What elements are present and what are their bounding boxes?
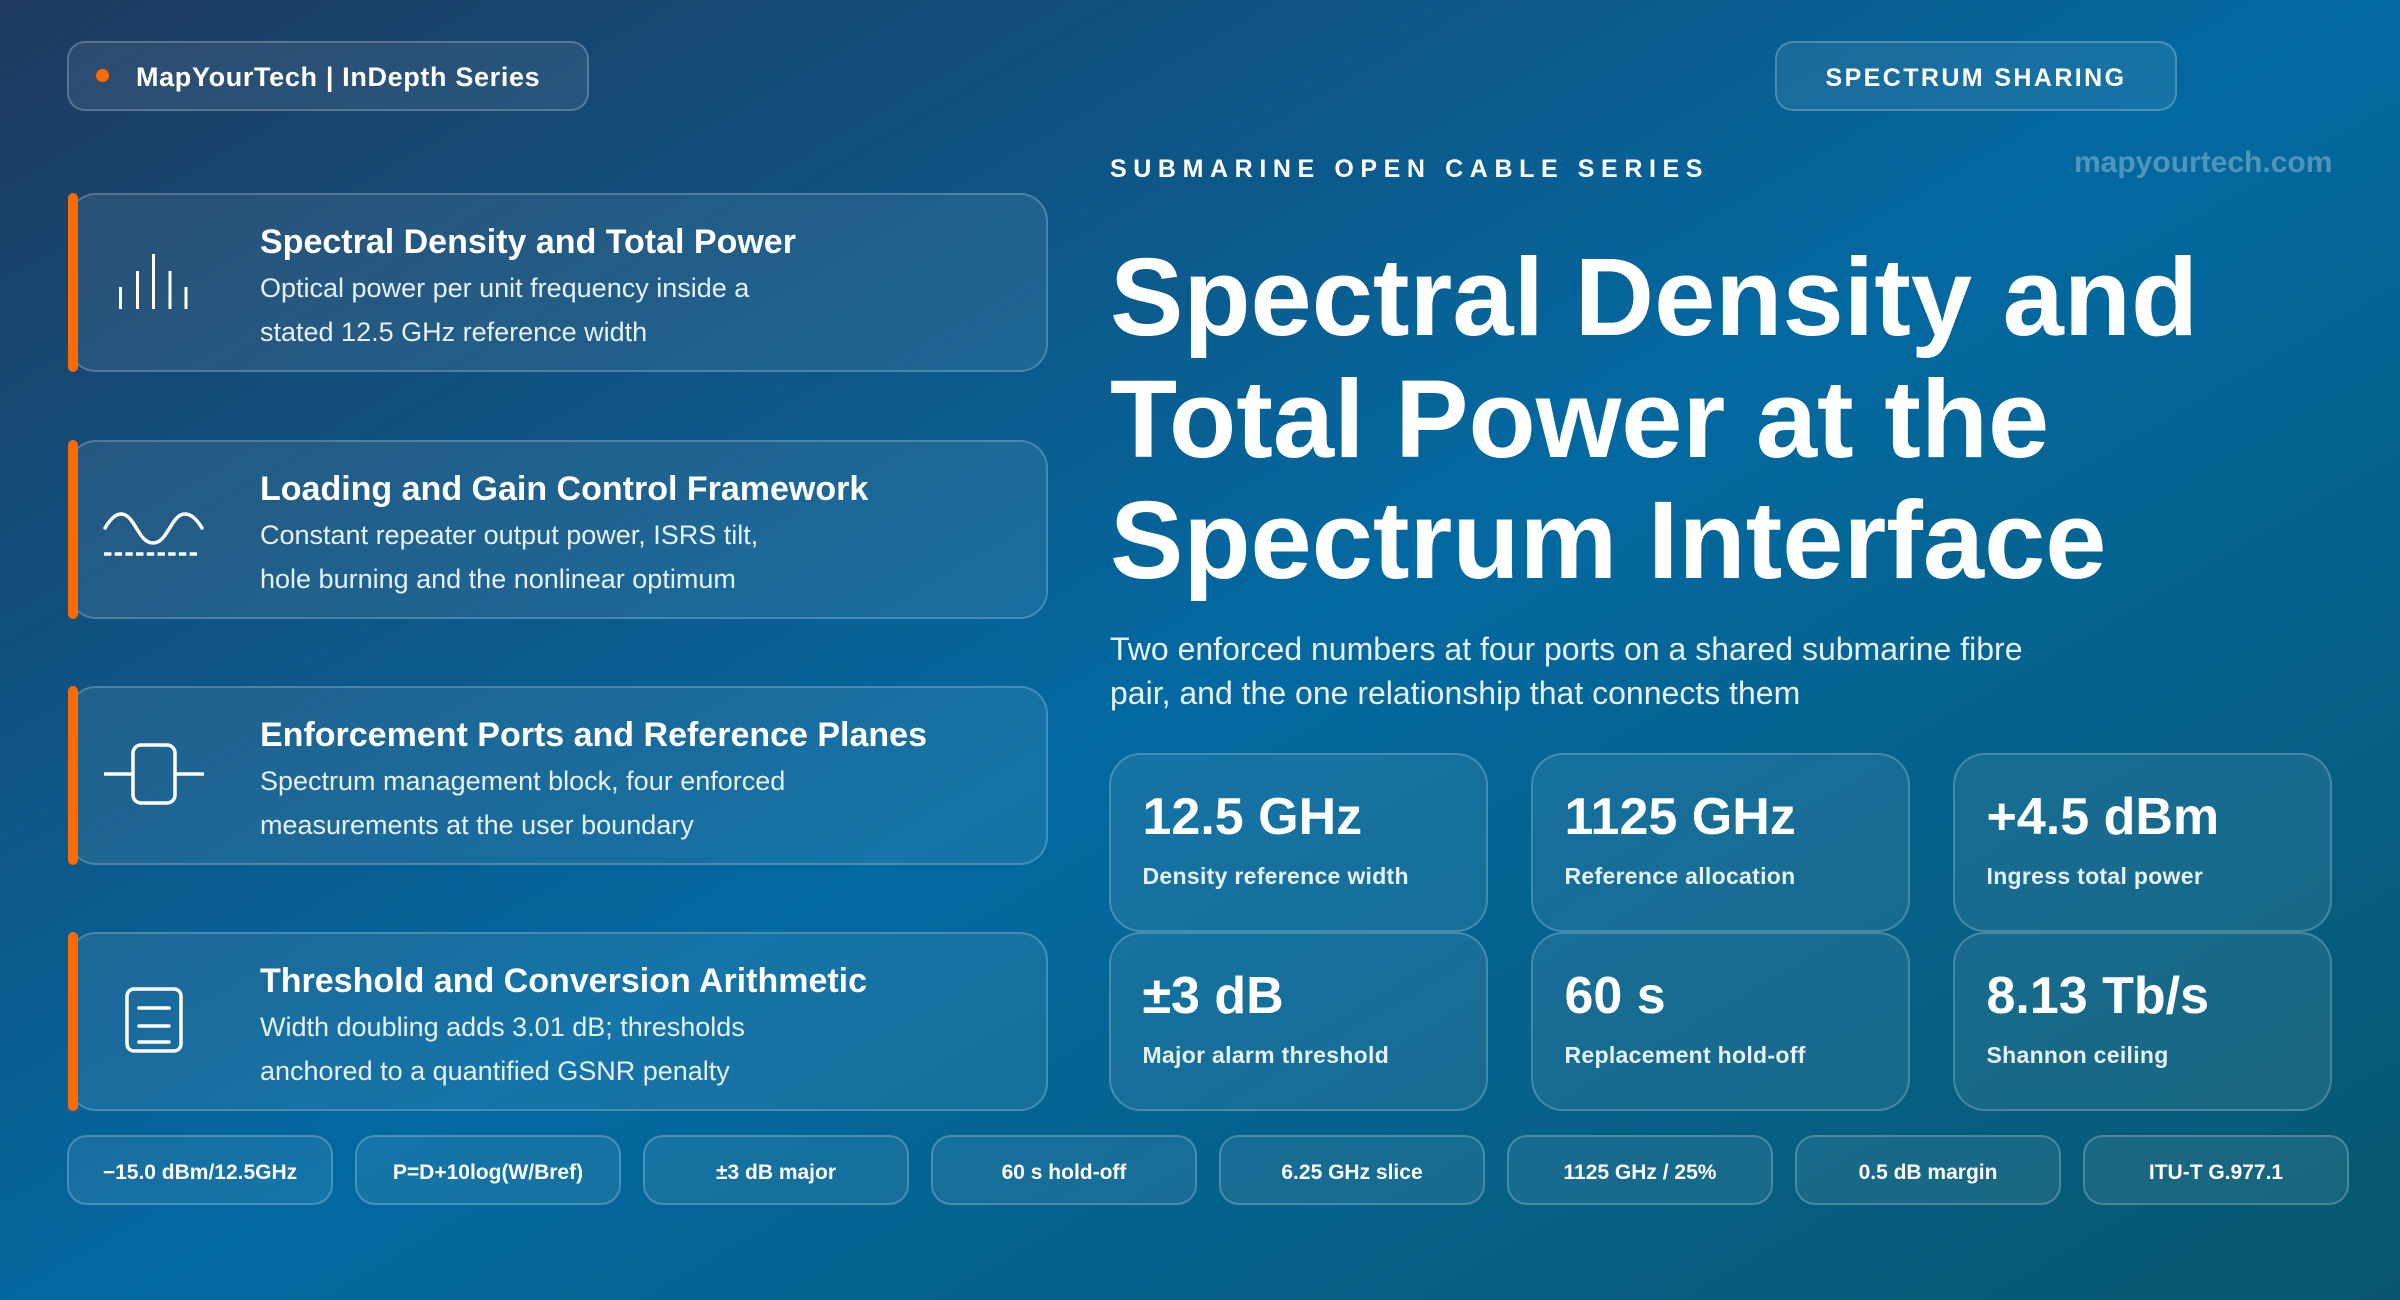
stat: Shannon ceiling: 8.13 Tb/s (1986, 966, 2209, 1024)
description: stated 12.5 GHz reference width (260, 316, 647, 346)
icon: spectrum bars (119, 254, 188, 309)
icon: document (125, 987, 183, 1053)
heading: Threshold and Conversion Arithmetic (260, 962, 867, 1000)
chip: allocation (1507, 1135, 1773, 1205)
title: Total Power at the (1110, 358, 2049, 480)
stat: ingress total power: Ingress total power (1986, 862, 2203, 888)
chip: density value (67, 1135, 333, 1205)
description (260, 272, 750, 346)
stat: major alarm threshold (1109, 932, 1488, 1111)
title: Spectral Density and (1110, 236, 2198, 359)
description: hole burning and the nonlinear optimum (260, 564, 736, 594)
chip: standard: ITU-T G.977.1 (2149, 1161, 2283, 1184)
heading: Enforcement Ports and Reference Planes (260, 716, 927, 754)
panel: enforcement ports (68, 686, 1048, 865)
stat: major alarm threshold: ±3 dB (1142, 966, 1284, 1024)
brand pill (67, 41, 589, 111)
stat: reference allocation: 1125 GHz (1564, 788, 1796, 846)
stat: reference allocation (1531, 753, 1910, 932)
subtitle (1110, 631, 2022, 711)
chip: conversion formula: P=D+10log(W/Bref) (393, 1161, 583, 1184)
panel: threshold arithmetic (68, 932, 1048, 1111)
stat: Shannon ceiling: Shannon ceiling (1986, 1042, 2169, 1068)
stat: ingress total power (1953, 753, 2332, 932)
description (260, 1012, 745, 1086)
description: Width doubling adds 3.01 dB; thresholds (260, 1012, 745, 1042)
chip: standard (2083, 1135, 2349, 1205)
subtitle: pair, and the one relationship that connects them (1110, 675, 1800, 711)
stat: replacement hold-off (1531, 932, 1910, 1111)
subtitle: Two enforced numbers at four ports on a shared submarine fibre (1110, 631, 2022, 667)
orange dot (96, 69, 109, 82)
chip: margin: 0.5 dB margin (1859, 1161, 1997, 1184)
description (260, 520, 758, 594)
chip: slice (1219, 1135, 1485, 1205)
stat: major alarm threshold: Major alarm threshold (1142, 1042, 1389, 1068)
description: Constant repeater output power, ISRS tilt, (260, 520, 758, 550)
description: Optical power per unit frequency inside a (260, 272, 749, 302)
stat: density reference width (1109, 753, 1488, 932)
stat: reference allocation: Reference allocation (1564, 862, 1795, 888)
chip: margin (1795, 1135, 2061, 1205)
stat: ingress total power: +4.5 dBm (1986, 788, 2219, 846)
icon: block with ports (104, 743, 204, 805)
heading: Spectral Density and Total Power (260, 222, 796, 260)
description: measurements at the user boundary (260, 810, 694, 840)
stat: replacement hold-off: 60 s (1564, 966, 1666, 1024)
panel: loading and gain (68, 440, 1048, 619)
topic pill (1775, 41, 2177, 111)
watermark: mapyourtech.com (2074, 146, 2332, 179)
title (1110, 236, 2198, 602)
topic pill: SPECTRUM SHARING (1826, 64, 2126, 92)
chip: major alarm: ±3 dB major (716, 1161, 836, 1184)
chip: slice: 6.25 GHz slice (1281, 1161, 1423, 1184)
brand text: MapYourTech | InDepth Series (136, 62, 540, 92)
chip: hold-off (931, 1135, 1197, 1205)
stat: density reference width: Density reference width (1142, 862, 1409, 888)
panel: spectral density (68, 193, 1048, 372)
icon: wave over dashed line (103, 512, 204, 556)
chip: major alarm (643, 1135, 909, 1205)
chip: conversion formula (355, 1135, 621, 1205)
chip: density value: −15.0 dBm/12.5GHz (103, 1161, 297, 1184)
description: anchored to a quantified GSNR penalty (260, 1056, 730, 1086)
description (260, 766, 785, 840)
chip: hold-off: 60 s hold-off (1002, 1161, 1126, 1184)
title: Spectrum Interface (1110, 479, 2106, 602)
stat: density reference width: 12.5 GHz (1142, 788, 1362, 846)
stat: replacement hold-off: Replacement hold-off (1564, 1042, 1806, 1068)
eyebrow: SUBMARINE OPEN CABLE SERIES (1110, 155, 1709, 183)
stat: Shannon ceiling (1953, 932, 2332, 1111)
heading: Loading and Gain Control Framework (260, 470, 868, 508)
description: Spectrum management block, four enforced (260, 766, 785, 796)
chip: allocation: 1125 GHz / 25% (1564, 1161, 1716, 1184)
